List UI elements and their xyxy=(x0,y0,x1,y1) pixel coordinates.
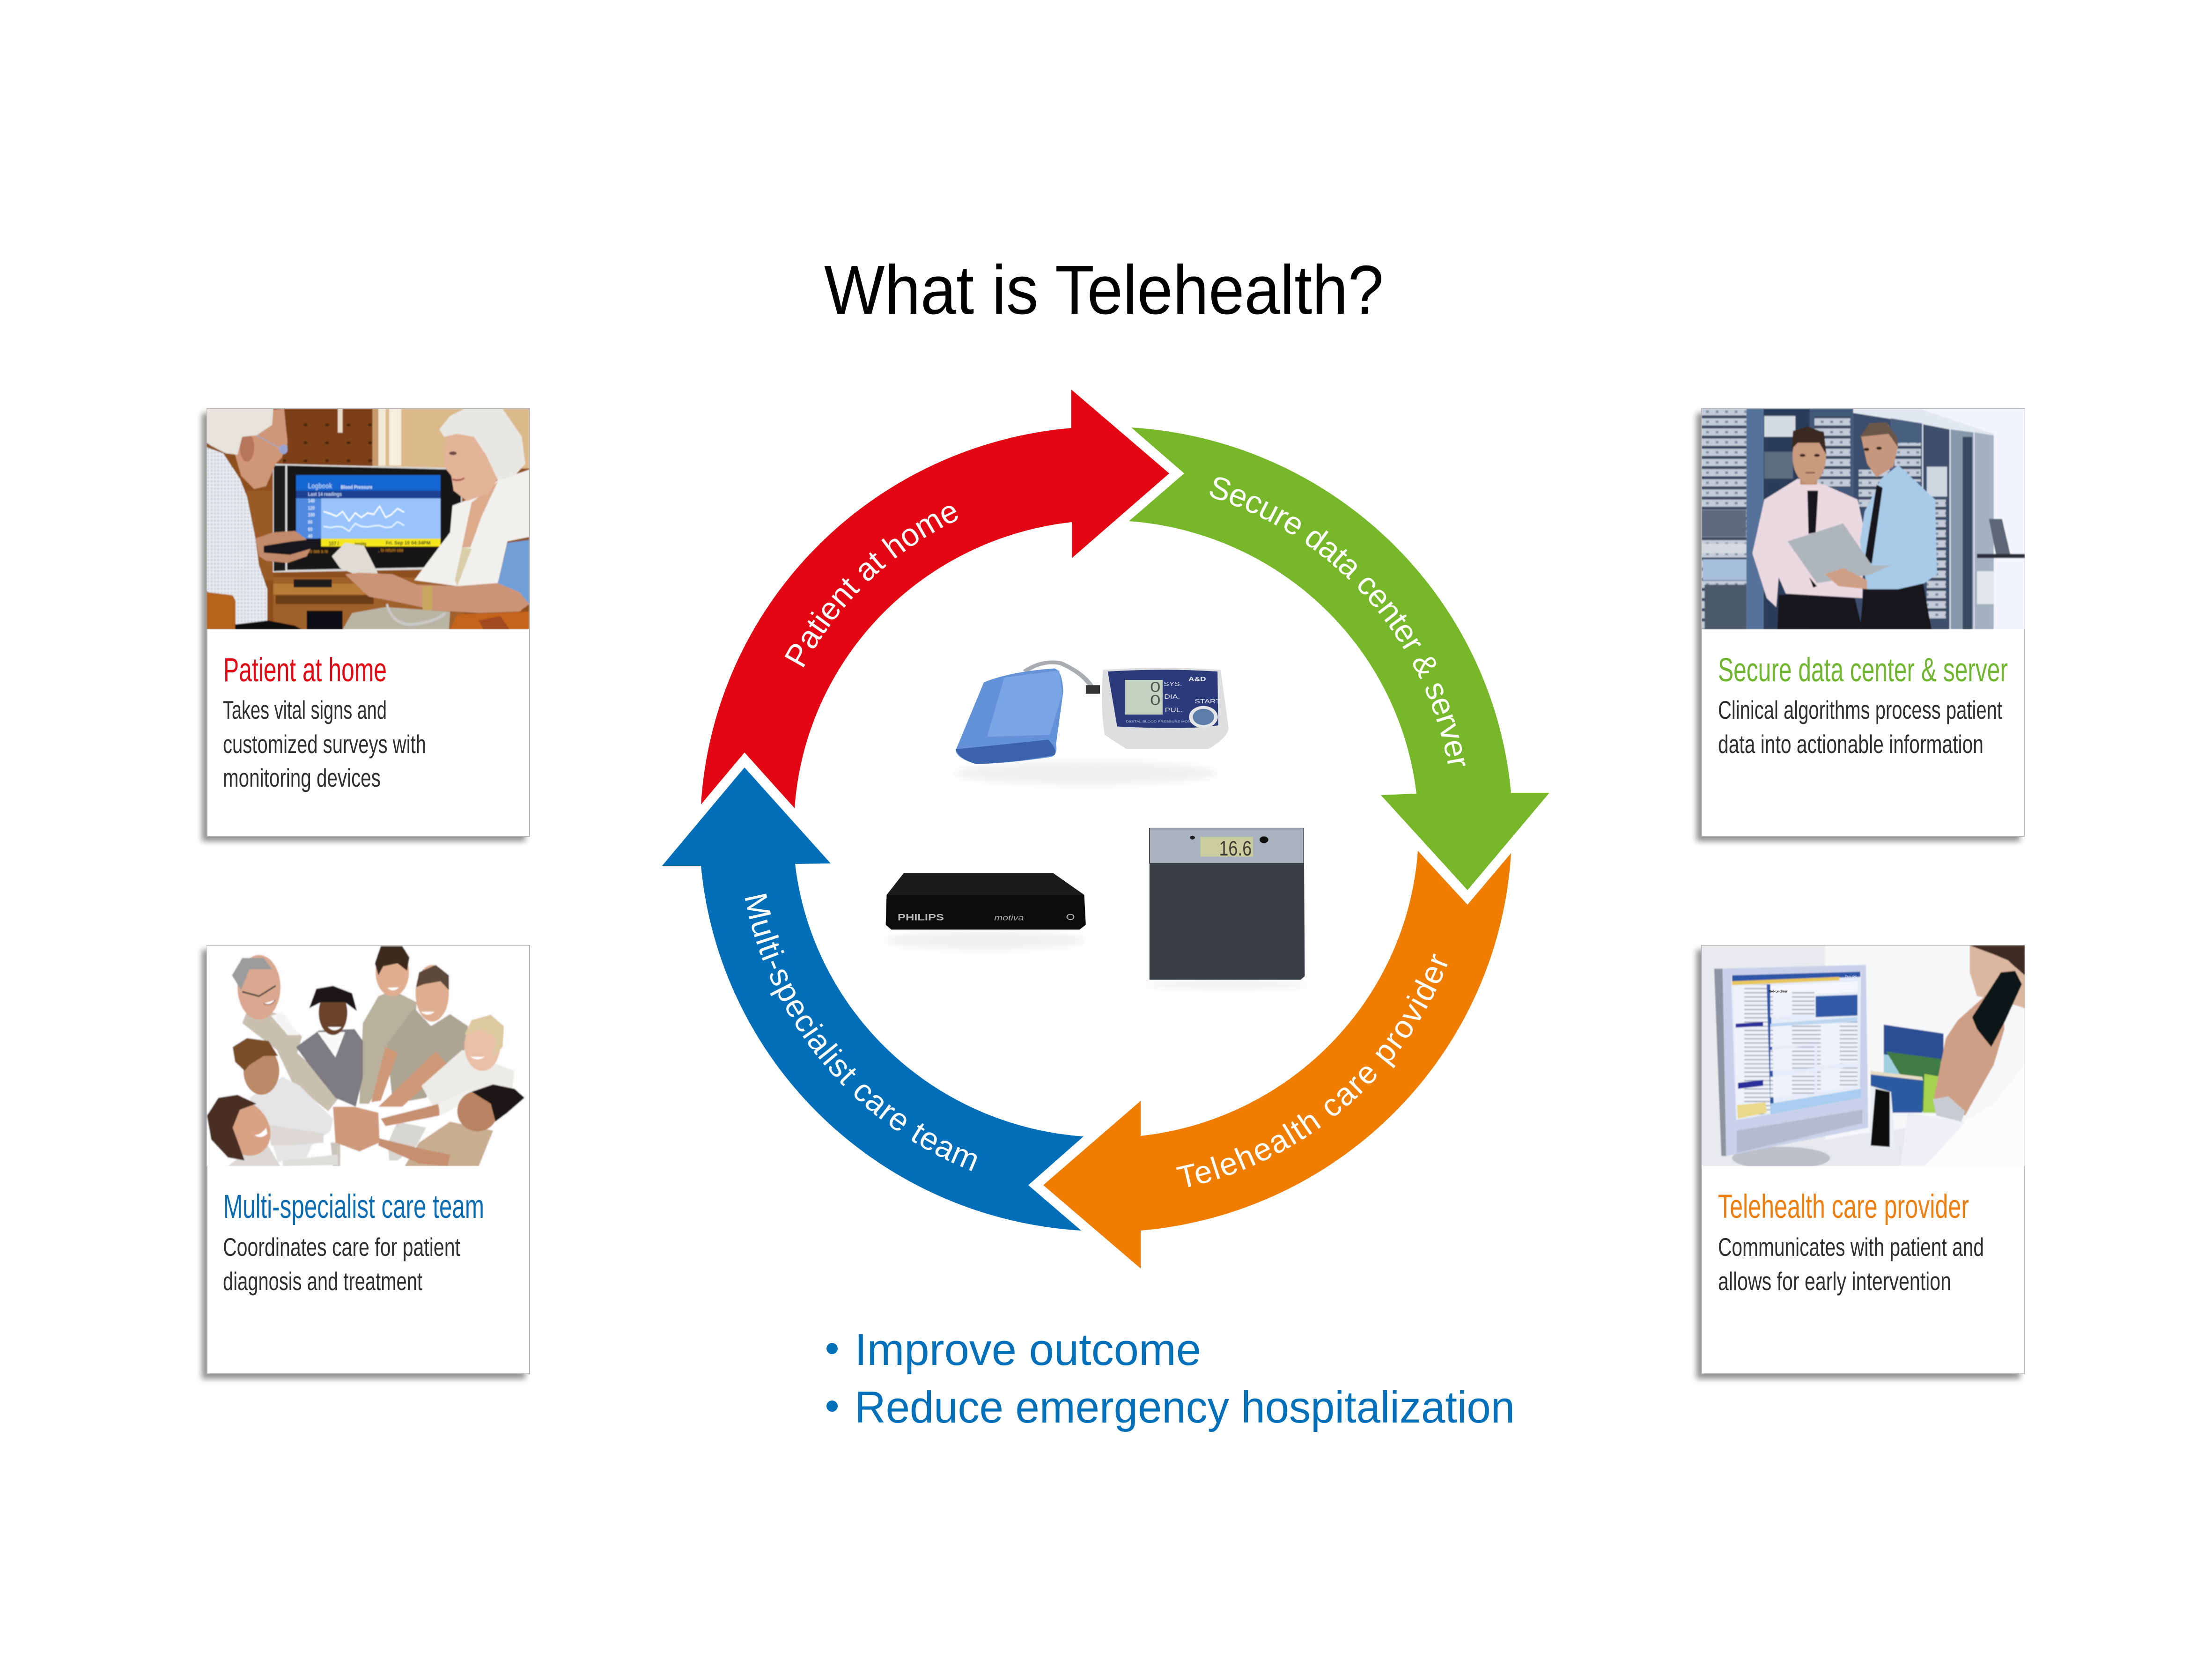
books xyxy=(1884,1025,1944,1062)
device: blood pressure cuff and monitor: 0 xyxy=(1150,679,1161,695)
photo: care provider at workstation: PHILIPS xyxy=(1845,975,1857,980)
provider xyxy=(1901,1065,2025,1166)
photo: couple at home viewing TV logbook: To see a re xyxy=(308,549,328,554)
arrow: multi-specialist care team: Multi-specialist care team xyxy=(737,890,985,1179)
benefits bullet list xyxy=(826,1325,1515,1432)
device: digital weighing scale: 16.6 xyxy=(1219,837,1252,860)
arrow: telehealth care provider xyxy=(1043,851,1511,1268)
photo: couple at home viewing TV logbook: 140 xyxy=(308,498,315,504)
benefits bullet list: Reduce emergency hospitalization xyxy=(855,1382,1515,1432)
photo: couple at home viewing TV logbook: Logbook xyxy=(308,482,332,490)
arrow: telehealth care provider: Telehealth care provider xyxy=(1174,948,1457,1196)
photo: couple at home viewing TV logbook: 120 xyxy=(308,506,315,511)
panel: telehealth care provider xyxy=(1702,945,2025,1374)
text: patient description xyxy=(223,695,426,792)
device: digital weighing scale xyxy=(1145,828,1308,989)
woman xyxy=(332,543,378,574)
panel: patient at home xyxy=(206,409,530,836)
photo: care provider at workstation: Bob Leichner xyxy=(1769,990,1788,993)
panel: secure data center and server xyxy=(1702,409,2025,836)
arrow: patient at home xyxy=(701,390,1169,808)
photo: two engineers in server room xyxy=(1702,409,2025,629)
photo: couple at home viewing TV logbook: 80 xyxy=(308,520,313,525)
photo: couple at home viewing TV logbook: 40 xyxy=(308,534,313,539)
text: provider description: allows for early intervention xyxy=(1718,1267,1951,1296)
text: patient description: Takes vital signs and xyxy=(223,695,387,724)
text: patient description: monitoring devices xyxy=(223,763,381,792)
man xyxy=(206,447,267,626)
device: Philips motiva set-top box xyxy=(885,873,1086,950)
benefits bullet list: Improve outcome xyxy=(855,1325,1201,1375)
device: blood pressure cuff and monitor: 0 xyxy=(1150,692,1161,708)
text: care team description: diagnosis and treatment xyxy=(223,1267,422,1296)
text: data center description: Clinical algorithms process patient xyxy=(1718,695,2002,724)
arrow: secure data center and server: Secure data center & server xyxy=(1204,469,1477,770)
text: provider description: Communicates with patient and xyxy=(1718,1232,1984,1261)
photo: couple at home viewing TV logbook: mmHg xyxy=(354,541,367,546)
laptop xyxy=(1787,524,1891,583)
photo: couple at home viewing TV logbook: Blood Pressure xyxy=(341,485,372,490)
heading: patient at home: Patient at home xyxy=(223,652,387,689)
text: care team description xyxy=(223,1232,460,1296)
photo: couple at home viewing TV logbook: , to return use xyxy=(378,548,404,553)
photo: couple at home viewing TV logbook: 100 xyxy=(308,512,315,518)
heading: care provider: Telehealth care provider xyxy=(1718,1188,1969,1225)
photo: couple at home viewing TV logbook xyxy=(206,409,529,629)
photo: team joining hands xyxy=(206,945,529,1166)
text: care team description: Coordinates care for patient xyxy=(223,1232,460,1261)
photo: couple at home viewing TV logbook: Fri. Sep 10 04:34PM xyxy=(385,540,430,546)
TV xyxy=(273,464,462,572)
device: blood pressure cuff and monitor: DIA. xyxy=(1164,693,1180,700)
device: blood pressure cuff and monitor: PUL. xyxy=(1165,707,1183,714)
panel: multi-specialist care team xyxy=(206,945,530,1374)
device: blood pressure cuff and monitor xyxy=(954,663,1229,785)
arrow: multi-specialist care team xyxy=(662,767,1084,1231)
text: data center description: data into actionable information xyxy=(1718,730,1983,759)
arrow: patient at home: Patient at home xyxy=(778,493,964,673)
device: Philips motiva set-top box: motiva xyxy=(994,914,1024,922)
heading: care team: Multi-specialist care team xyxy=(223,1188,484,1225)
text: data center description xyxy=(1718,695,2002,759)
left man xyxy=(1777,589,1862,629)
heading: secure data center: Secure data center & server xyxy=(1718,652,2008,689)
photo: couple at home viewing TV logbook: 107 / xyxy=(329,541,339,547)
device: blood pressure cuff and monitor: START xyxy=(1194,698,1221,705)
photo: couple at home viewing TV logbook: Last 14 readings xyxy=(308,492,342,498)
device: blood pressure cuff and monitor: DIGITAL BLOOD PRESSURE MONITOR xyxy=(1126,720,1201,723)
photo: care provider at workstation xyxy=(1702,945,2025,1169)
text: patient description: customized surveys with xyxy=(223,730,426,759)
arrow: secure data center and server xyxy=(1129,428,1549,890)
device: Philips motiva set-top box: PHILIPS xyxy=(898,912,944,922)
device: blood pressure cuff and monitor: A&D xyxy=(1188,676,1206,683)
text: provider description xyxy=(1718,1232,1984,1296)
device: blood pressure cuff and monitor: SYS. xyxy=(1164,681,1182,687)
title: What is Telehealth? xyxy=(824,251,1384,329)
photo: couple at home viewing TV logbook: 60 xyxy=(308,527,313,532)
right man xyxy=(1860,583,1932,629)
